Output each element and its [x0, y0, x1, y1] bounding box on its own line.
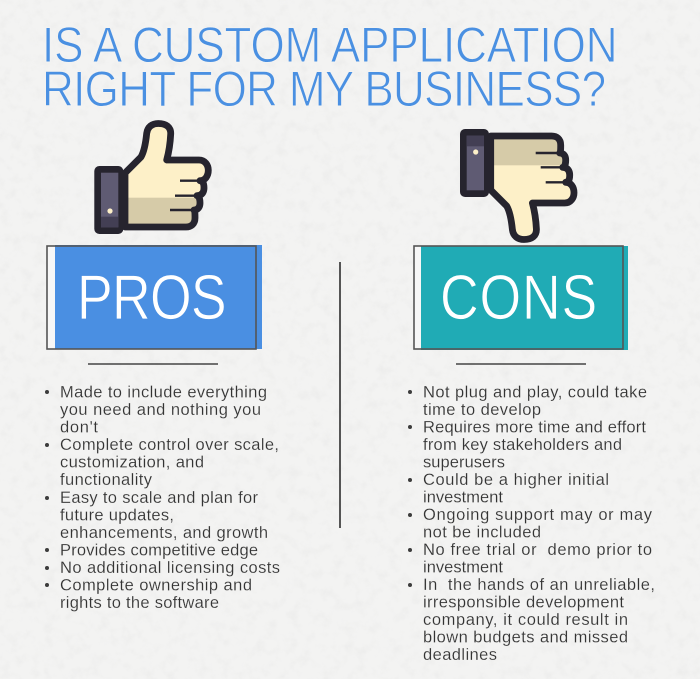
list: pros: enhancements, and growth [60, 524, 268, 542]
list: cons: investment [423, 488, 503, 506]
list: cons: deadlines [423, 646, 497, 664]
list: pros: Complete ownership and [60, 576, 252, 594]
bullet markers: cons [408, 390, 412, 587]
list: cons: In the hands of an unreliable, [423, 576, 655, 594]
panel: pros heading: PROS [77, 263, 227, 333]
list: cons: not be included [423, 524, 541, 542]
list: pros: Provides competitive edge [60, 542, 258, 560]
list: pros: rights to the software [60, 594, 219, 612]
list: cons: irresponsible development [423, 594, 624, 612]
list: cons: Could be a higher initial [423, 471, 609, 489]
list: cons: investment [423, 558, 503, 576]
panel: cons heading: CONS [440, 263, 597, 333]
list: cons: from key stakeholders and [423, 436, 622, 454]
list: pros: don't [60, 418, 98, 436]
list: pros: you need and nothing you [60, 401, 261, 419]
list: pros: future updates, [60, 506, 174, 524]
list: cons: Requires more time and effort [423, 418, 646, 436]
list: pros: Complete control over scale, [60, 436, 279, 454]
panel: pros heading [47, 245, 262, 349]
list: cons: Not plug and play, could take [423, 384, 647, 402]
icon: thumbs up [94, 124, 215, 234]
list: cons: superusers [423, 454, 505, 472]
title: IS A CUSTOM APPLICATION [42, 16, 618, 73]
list: cons: time to develop [423, 401, 541, 419]
list: pros: No additional licensing costs [60, 559, 280, 577]
list: pros: Made to include everything [60, 384, 267, 402]
bullet markers: pros [45, 390, 49, 587]
list: cons: blown budgets and missed [423, 628, 628, 646]
title: RIGHT FOR MY BUSINESS? [42, 60, 606, 117]
list: pros [45, 384, 280, 612]
list: pros: Easy to scale and plan for [60, 489, 258, 507]
list: cons: Ongoing support may or may [423, 506, 653, 524]
icon: thumbs down [460, 129, 581, 240]
list: cons: company, it could result in [423, 611, 628, 629]
title [42, 16, 618, 117]
panel: cons heading [414, 246, 628, 350]
list: pros: functionality [60, 471, 153, 489]
list: cons [408, 384, 655, 664]
list: pros: customization, and [60, 454, 204, 472]
list: cons: No free trial or demo prior to [423, 541, 652, 559]
